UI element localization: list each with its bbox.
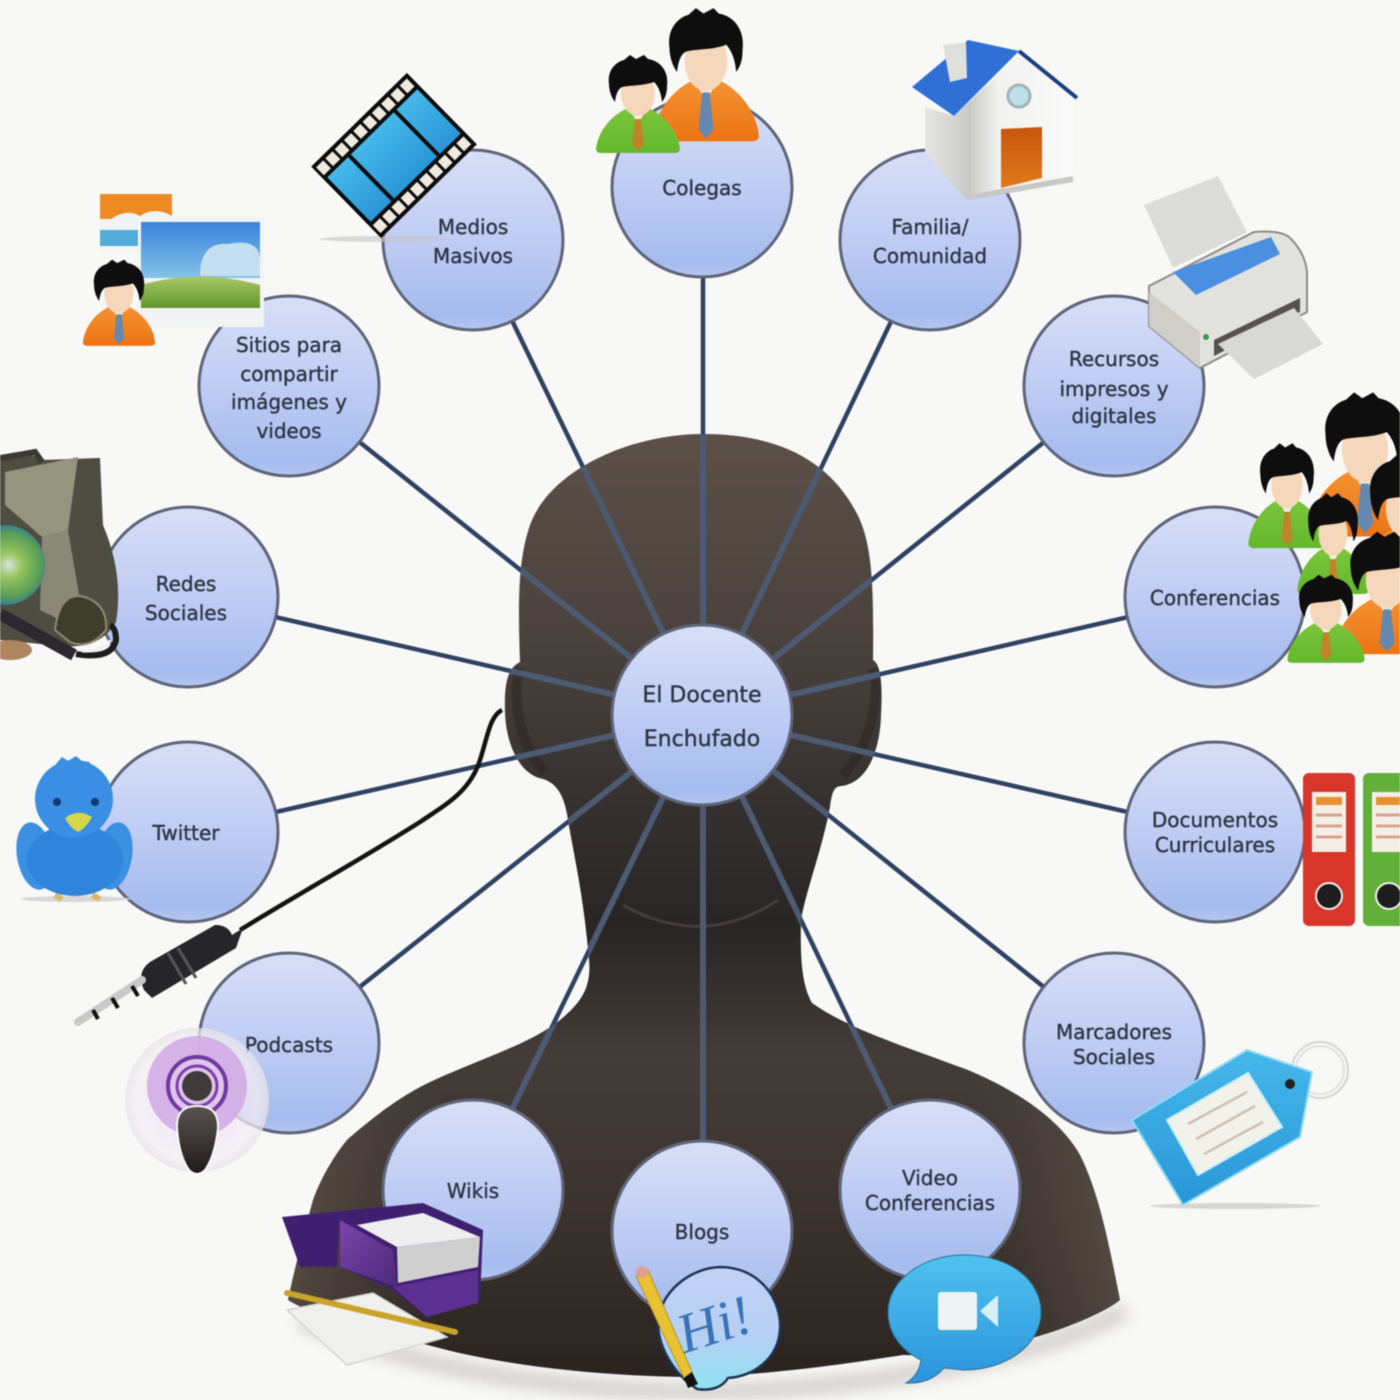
node: Wikis xyxy=(383,1100,563,1280)
icon: twitter bird xyxy=(11,756,138,902)
icon: backpack and globe xyxy=(0,452,118,660)
icon: video chat bubble xyxy=(888,1255,1041,1383)
audio cable and jack plug xyxy=(78,710,502,1022)
node: Marcadores Sociales xyxy=(1024,953,1204,1133)
node: Documentos Curriculares xyxy=(1125,742,1305,922)
node: Sitios para compartir imagenes y videos xyxy=(199,296,379,476)
head silhouette xyxy=(288,434,1125,1392)
node: Recursos impresos y digitales: digitales xyxy=(1072,404,1156,428)
icon: blog bubble with pencil: Hi! xyxy=(668,1284,760,1366)
node: Video Conferencias: Conferencias xyxy=(865,1191,995,1215)
node: Colegas xyxy=(612,97,792,277)
node: Conferencias: Conferencias xyxy=(1150,586,1280,610)
node: Documentos Curriculares: Documentos xyxy=(1152,808,1278,832)
node: Recursos impresos y digitales xyxy=(1024,296,1204,476)
node: Twitter: Twitter xyxy=(151,821,220,845)
node: Conferencias xyxy=(1125,507,1305,687)
central node: El Docente Enchufado xyxy=(612,625,792,805)
node: Familia/Comunidad: Comunidad xyxy=(873,244,987,268)
node: Blogs: Blogs xyxy=(675,1220,729,1244)
node: Twitter xyxy=(98,742,278,922)
node: Video Conferencias: Video xyxy=(902,1166,958,1190)
node: Sitios para compartir imagenes y videos: videos xyxy=(256,419,322,443)
icon: binders xyxy=(1303,773,1400,926)
central node: El Docente Enchufado: Enchufado xyxy=(644,727,760,752)
node: Colegas: Colegas xyxy=(662,176,742,200)
node: Medios Masivos: Medios xyxy=(438,215,508,239)
central node: El Docente Enchufado: El Docente xyxy=(642,683,762,708)
node: Redes Sociales: Redes xyxy=(156,572,216,596)
node: Sitios para compartir imagenes y videos: imágenes y xyxy=(231,390,347,414)
node: Recursos impresos y digitales: impresos y xyxy=(1059,377,1169,401)
node: Sitios para compartir imagenes y videos: compartir xyxy=(240,362,339,386)
node: Recursos impresos y digitales: Recursos xyxy=(1069,347,1159,371)
node: Podcasts: Podcasts xyxy=(245,1033,333,1057)
node: Wikis: Wikis xyxy=(447,1179,499,1203)
node: Medios Masivos xyxy=(383,150,563,330)
node: Redes Sociales xyxy=(98,507,278,687)
connector lines xyxy=(276,278,1128,1140)
icon: podcast xyxy=(125,1028,269,1174)
node: Redes Sociales: Sociales xyxy=(145,601,227,625)
icon: tag xyxy=(1132,1042,1348,1209)
icon: shared pictures and person xyxy=(83,194,264,346)
node: Marcadores Sociales: Sociales xyxy=(1073,1045,1155,1069)
icon: film strip xyxy=(311,73,477,242)
icon: house xyxy=(912,40,1077,200)
node: Medios Masivos: Masivos xyxy=(433,244,513,268)
node: Sitios para compartir imagenes y videos: Sitios para xyxy=(236,333,342,357)
node: Familia/Comunidad xyxy=(840,150,1020,330)
icon: wiki box and notepad xyxy=(282,1203,483,1365)
node: Familia/Comunidad: Familia/ xyxy=(891,215,969,239)
node: Marcadores Sociales: Marcadores xyxy=(1056,1020,1172,1044)
icon: colleagues xyxy=(596,8,759,153)
icon: printer xyxy=(1144,176,1323,379)
icon: blog bubble with pencil xyxy=(636,1266,780,1390)
node: Video Conferencias xyxy=(840,1100,1020,1280)
node: Documentos Curriculares: Curriculares xyxy=(1155,833,1275,857)
icon: conference crowd xyxy=(1248,392,1400,663)
node: Blogs xyxy=(612,1141,792,1321)
node: Podcasts xyxy=(199,953,379,1133)
